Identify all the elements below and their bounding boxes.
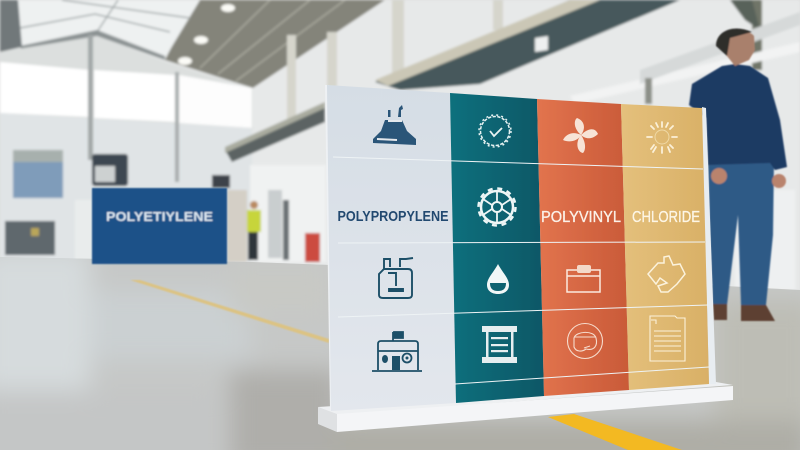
label: chloride: CHLORIDE <box>632 209 700 226</box>
upper wall <box>0 36 253 130</box>
pipes <box>570 42 800 104</box>
label: polyvinyl: POLYVINYL <box>541 209 621 226</box>
icon: fan <box>563 118 598 153</box>
ceiling <box>165 0 385 88</box>
right wall <box>253 0 800 295</box>
white panels behind man <box>735 190 795 290</box>
head <box>722 31 755 66</box>
hair <box>716 28 752 56</box>
polished floor <box>0 250 800 450</box>
label: polypropylene: POLYPROPYLENE <box>338 208 448 225</box>
skylight <box>18 0 200 58</box>
jacket <box>689 64 787 170</box>
blue container: polyethylene: POLYETIYLENE <box>106 209 213 224</box>
shoes <box>713 304 727 320</box>
machinery <box>92 154 128 186</box>
icon: case <box>567 265 600 292</box>
icon: puzzle outline <box>648 256 685 292</box>
ceiling lights <box>178 4 235 65</box>
lower beam <box>225 105 325 162</box>
yellow floor line <box>130 280 329 343</box>
column: orange <box>537 99 629 396</box>
column: gold <box>621 104 709 390</box>
door <box>5 221 55 255</box>
board edge <box>702 107 716 384</box>
icon: factory <box>373 105 416 145</box>
equipment on right <box>250 165 326 262</box>
icon: large gear <box>478 188 516 226</box>
row dividers <box>333 157 709 384</box>
icon: gear with check <box>479 115 511 147</box>
lower wall <box>0 113 252 262</box>
icon: jug <box>379 258 413 298</box>
hands <box>711 168 727 184</box>
icon: round badge <box>568 324 602 358</box>
sign board <box>318 85 733 432</box>
column: polypropylene white <box>327 85 456 411</box>
column: teal <box>450 93 544 403</box>
icon: water drop <box>487 264 509 294</box>
bright windows <box>0 62 90 117</box>
poster <box>13 150 63 198</box>
icon: scroll document <box>482 326 517 363</box>
board base <box>318 382 733 432</box>
jeans <box>708 160 774 305</box>
yellow floor line foreground <box>548 414 682 450</box>
blue container: polyethylene <box>92 188 227 264</box>
icon: document <box>650 316 685 361</box>
icon: sun <box>647 122 677 153</box>
man standing <box>689 28 787 321</box>
icon: school building <box>372 332 422 371</box>
upper beam <box>375 0 680 90</box>
